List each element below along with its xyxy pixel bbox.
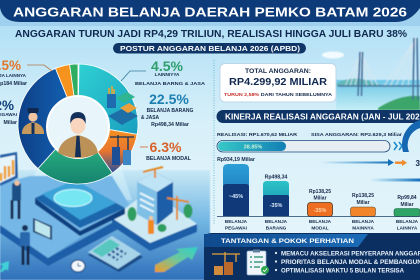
bar: belanja barang: -35% — [270, 203, 283, 209]
category labels: BARANG — [266, 226, 287, 230]
slice: belanja lainnya orange — [56, 65, 78, 124]
arrows to gauge — [320, 159, 420, 182]
section pill: postur anggaran — [113, 43, 306, 54]
bridge scene — [322, 38, 420, 110]
gauge — [402, 120, 420, 168]
bar: belanja lainnya green: Miliar — [400, 202, 414, 208]
main platform — [0, 176, 130, 266]
text: realisasi and sisa anggaran: SISA ANGGARAN: RP2.629,3 Miliar — [311, 132, 402, 138]
category labels: BELANJA — [396, 219, 419, 224]
bar: belanja modal: -35% — [314, 208, 327, 214]
person at laptop — [20, 218, 52, 265]
baseline — [217, 216, 420, 218]
growth arrow — [155, 247, 198, 272]
bullet list: OPTIMALISASI WAKTU 5 BULAN TERSISA — [281, 268, 405, 274]
text: realisasi and sisa anggaran — [217, 132, 402, 138]
bar chart: realisasi per category — [217, 157, 420, 230]
subtitle: ANGGARAN TURUN JADI RP4,29 TRILIUN, REALISASI HINGGA JULI BARU 38% — [15, 28, 408, 40]
small teal arrow — [0, 261, 9, 272]
text: realisasi and sisa anggaran: REALISASI: RP1.670,62 MILIAR — [217, 132, 298, 138]
trees and worker — [128, 204, 192, 234]
icon: officer — [22, 108, 44, 134]
callout: barang dan jasa 22.5% — [141, 91, 193, 128]
monitor and analyst — [0, 152, 21, 219]
clock — [71, 260, 85, 272]
bar: belanja barang — [263, 174, 289, 216]
category labels: BELANJA — [225, 219, 248, 224]
callout: belanja pegawai left: Miliar — [3, 120, 17, 126]
panel: total anggaran: TURUN 2,58% DARI TAHUN SEBELUMNYA — [224, 92, 333, 97]
panel: total anggaran: RP4.299,92 MILIAR — [229, 77, 328, 88]
panel: tantangan dan pokok perhatian — [204, 233, 420, 280]
progress bar: 38.85% — [244, 144, 262, 150]
chevrons — [394, 142, 402, 150]
callout: belanja pegawai left — [0, 98, 17, 126]
isometric illustration: budget office scene — [0, 150, 210, 280]
building — [137, 172, 173, 225]
center avatar: civil servant — [47, 96, 109, 158]
callout: lainnya 4.5%: LAINNIYYA — [155, 72, 180, 77]
category labels: PEGAWAI — [225, 226, 247, 230]
category labels — [225, 219, 419, 230]
section pill: kinerja realisasi: KINERJA REALISASI ANGGARAN (JAN - JUL 2026) — [225, 112, 420, 122]
bar: belanja lainnya orange — [350, 193, 376, 216]
slice: pegawai — [18, 68, 78, 169]
icon: crane and building — [110, 135, 134, 165]
bar: belanja pegawai — [217, 157, 255, 216]
icon: construction crane — [212, 252, 240, 275]
category labels: MAINNYA — [352, 226, 374, 230]
dotted divider — [213, 60, 215, 224]
callout: belanja modal 6.3%: BELANJA MODAL — [146, 156, 192, 162]
callout: belanja lainnya left — [0, 58, 27, 87]
slice: barang & jasa — [78, 64, 138, 134]
callout: barang dan jasa 22.5%: Rp498,34 Miliar — [151, 122, 189, 128]
callout: lainnya 4.5% — [135, 58, 206, 86]
cranes — [143, 167, 189, 220]
slice: modal — [78, 124, 137, 173]
icon: clipboard checklist — [247, 250, 269, 275]
callout: belanja modal 6.3% — [146, 139, 192, 162]
bar: belanja lainnya green — [394, 195, 420, 216]
bar: belanja barang: Rp498,34 — [265, 174, 287, 180]
panel heading tab — [204, 234, 368, 247]
central glowing pad — [35, 180, 125, 236]
callout: barang dan jasa 22.5%: BELANJA BARANG — [147, 108, 193, 114]
callout: lainnya 4.5%: BELANJA BARNG & JASA — [135, 81, 206, 86]
bar: belanja lainnya orange: Miliar — [356, 200, 370, 206]
bar: belanja modal: Rp138,25 — [309, 189, 331, 195]
category labels: MODAL — [311, 226, 329, 230]
callout: lainnya 4.5%: 4.5% — [151, 58, 184, 74]
callout: belanja modal 6.3%: 6.3% — [150, 139, 182, 155]
section pill: postur anggaran: POSTUR ANGGARAN BELANJA 2026 (APBD) — [120, 46, 300, 53]
slice: lower green — [38, 124, 112, 184]
category labels: BELANJA — [265, 219, 288, 224]
title: ANGGARAN BELANJA DAERAH PEMKO BATAM 2026 — [13, 6, 407, 20]
callout: barang dan jasa 22.5%: 22.5% — [149, 91, 189, 107]
section pill: kinerja realisasi — [216, 110, 420, 123]
bullet list — [275, 250, 420, 274]
callout: barang dan jasa 22.5%: & JASA — [141, 115, 160, 121]
icon: stationery and documents — [107, 86, 138, 125]
bar: belanja modal: Miliar — [313, 196, 327, 202]
donut chart: budget composition — [18, 64, 138, 184]
bar: belanja pegawai: Rp934,19 Miliar — [217, 157, 255, 163]
category labels: LAINNYA — [397, 226, 418, 230]
bar: belanja pegawai: ~45% — [229, 194, 243, 200]
bar: belanja lainnya orange: Rp138,25 — [352, 193, 374, 199]
right platform — [112, 190, 197, 251]
calculator — [88, 236, 143, 272]
header banner — [0, 0, 420, 26]
cloud — [322, 52, 344, 58]
slice: belanja lainnya green — [70, 64, 78, 124]
bar: belanja modal — [308, 189, 332, 216]
category labels: BELANJA — [309, 219, 332, 224]
progress bar — [217, 140, 390, 152]
panel: total anggaran — [220, 64, 336, 102]
bar: belanja lainnya green: Rp99,84 — [397, 195, 417, 201]
panel: total anggaran: TOTAL ANGGARAN: — [245, 68, 311, 75]
panel heading tab: TANTANGAN & POKOK PERHATIAN — [221, 238, 354, 245]
leader lines — [27, 65, 148, 147]
category labels: BELANJA — [352, 219, 375, 224]
gauge: 3 — [416, 159, 420, 168]
